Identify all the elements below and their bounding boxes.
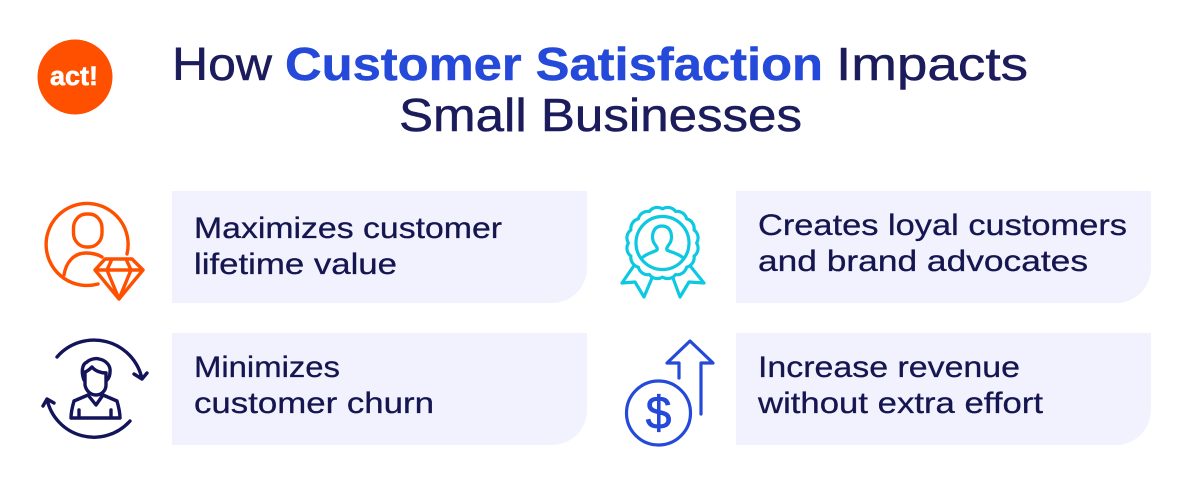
panel: maximizes customer lifetime value: Maximizes customer <box>194 212 502 245</box>
icon: dollar coin with up arrow: $ <box>646 386 671 438</box>
title: Customer Satisfaction <box>285 38 823 90</box>
logo: act!: act! <box>50 61 98 91</box>
panel: minimizes customer churn <box>172 333 587 445</box>
panel: increase revenue: without extra effort <box>757 387 1044 420</box>
title: Small Businesses <box>399 89 802 141</box>
title: How <box>172 38 273 90</box>
title <box>172 38 1028 141</box>
panel: creates loyal customers: Creates loyal customers <box>758 209 1127 242</box>
panel: creates loyal customers: and brand advocates <box>758 245 1088 278</box>
title: Impacts <box>836 38 1028 90</box>
icon: dollar coin with up arrow <box>626 341 713 445</box>
icon: customer with diamond <box>46 203 143 299</box>
panel: creates loyal customers <box>736 191 1151 303</box>
panel: minimizes customer churn: customer churn <box>194 387 434 420</box>
panel: maximizes customer lifetime value <box>172 191 587 303</box>
icon: customer churn cycle <box>43 340 147 437</box>
panel: increase revenue: Increase revenue <box>758 351 1020 384</box>
panel: maximizes customer lifetime value: lifetime value <box>194 248 397 281</box>
icon: loyalty award badge <box>622 207 704 297</box>
logo: act! <box>38 40 112 114</box>
panel: minimizes customer churn: Minimizes <box>194 351 340 384</box>
panel: increase revenue <box>736 333 1151 445</box>
